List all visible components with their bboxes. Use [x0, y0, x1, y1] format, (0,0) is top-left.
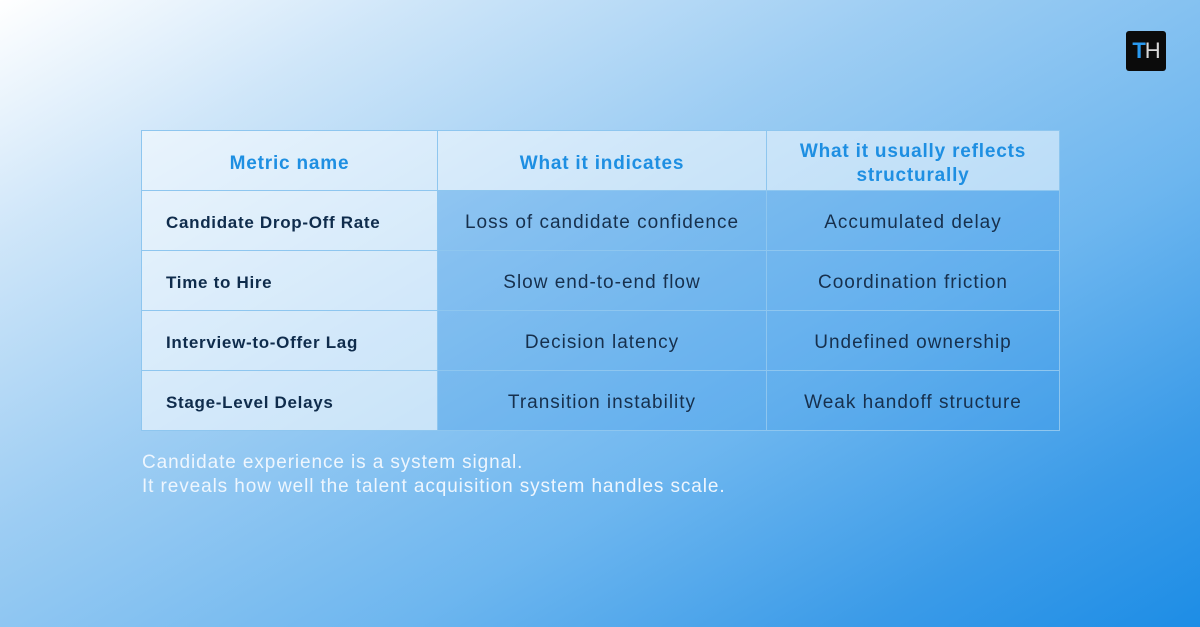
logo: TH — [1132, 38, 1160, 63]
table: Transition instability — [508, 392, 696, 412]
table: Loss of candidate confidence — [465, 212, 739, 232]
table: Undefined ownership — [814, 332, 1012, 352]
table: structurally — [856, 164, 970, 186]
table: Stage-Level Delays — [166, 392, 334, 412]
table: Interview-to-Offer Lag — [166, 332, 358, 352]
caption: Candidate experience is a system signal. — [142, 452, 523, 473]
caption: It reveals how well the talent acquisition system handles scale. — [142, 476, 726, 497]
caption — [142, 452, 726, 497]
table: Coordination friction — [818, 272, 1008, 292]
table — [141, 130, 1060, 431]
table: Metric name — [230, 152, 349, 174]
table: Slow end-to-end flow — [503, 272, 701, 292]
logo — [1126, 31, 1166, 71]
table: Decision latency — [525, 332, 679, 352]
table: Weak handoff structure — [804, 392, 1022, 412]
table: What it usually reflects — [800, 140, 1026, 162]
table: Candidate Drop-Off Rate — [166, 212, 380, 232]
table: What it indicates — [520, 152, 684, 174]
table: Accumulated delay — [824, 212, 1002, 232]
table: Time to Hire — [166, 272, 272, 292]
